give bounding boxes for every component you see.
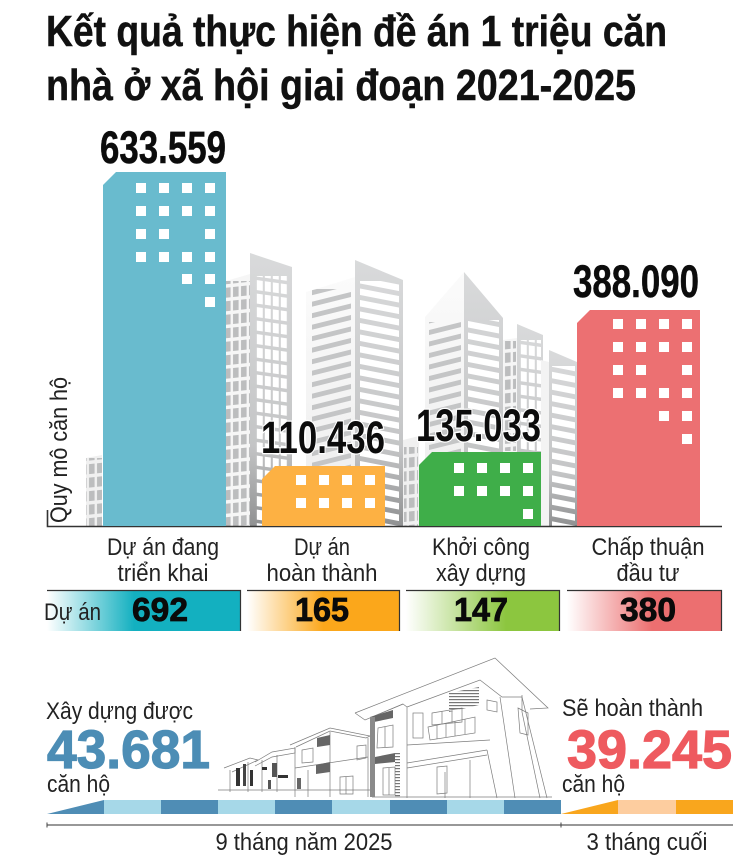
timeline axis with period labels <box>47 822 733 856</box>
illustration: row of houses <box>218 658 552 798</box>
stat: xây dựng được <box>46 698 210 798</box>
stat: sẽ hoàn thành: Sẽ hoàn thành <box>562 695 703 722</box>
timeline: last 3 months progress bar <box>561 800 733 814</box>
category labels: Dự án đang <box>107 534 219 561</box>
project count strip: 165 <box>295 591 349 628</box>
y axis <box>46 377 722 526</box>
title: nhà ở xã hội giai đoạn 2021-2025 <box>46 61 636 110</box>
y axis: Quy mô căn hộ <box>46 377 73 523</box>
stat: xây dựng được: Xây dựng được <box>46 698 193 725</box>
category labels: Dự án <box>294 534 350 561</box>
project count strip: 147 <box>454 591 508 628</box>
bar: dự án hoàn thành: 110.436 <box>261 412 385 463</box>
category labels: triển khai <box>118 560 208 587</box>
category labels: Khởi công <box>432 534 530 561</box>
stat: sẽ hoàn thành <box>562 695 732 798</box>
category labels: hoàn thành <box>266 560 378 587</box>
project count strip <box>44 590 722 631</box>
category labels: đầu tư <box>616 560 680 587</box>
bar: chấp thuận đầu tư: 388.090 <box>573 256 699 307</box>
timeline: 9 months progress bar <box>47 800 561 814</box>
stat: xây dựng được: 43.681 <box>47 720 210 780</box>
category labels <box>107 534 704 587</box>
stat: sẽ hoàn thành: 39.245 <box>567 720 732 780</box>
title <box>46 7 667 110</box>
category labels: xây dựng <box>436 560 526 587</box>
timeline axis with period labels: 9 tháng năm 2025 <box>216 829 392 856</box>
bar: khởi công xây dựng: 135.033 <box>416 400 541 451</box>
timeline axis with period labels: 3 tháng cuối <box>586 829 708 856</box>
project count strip: Dự án <box>44 599 101 626</box>
stat: sẽ hoàn thành: căn hộ <box>562 771 625 798</box>
bar: chấp thuận đầu tư <box>573 256 700 526</box>
bar: khởi công xây dựng <box>416 400 541 526</box>
bar: dự án hoàn thành <box>261 412 385 526</box>
background: grey city buildings <box>86 253 577 527</box>
bar: dự án đang triển khai: 633.559 <box>100 122 226 173</box>
stat: xây dựng được: căn hộ <box>47 771 110 798</box>
project count strip: 692 <box>132 591 188 628</box>
bar: dự án đang triển khai <box>100 122 226 526</box>
project count strip: 380 <box>620 591 676 628</box>
category labels: Chấp thuận <box>592 534 704 561</box>
